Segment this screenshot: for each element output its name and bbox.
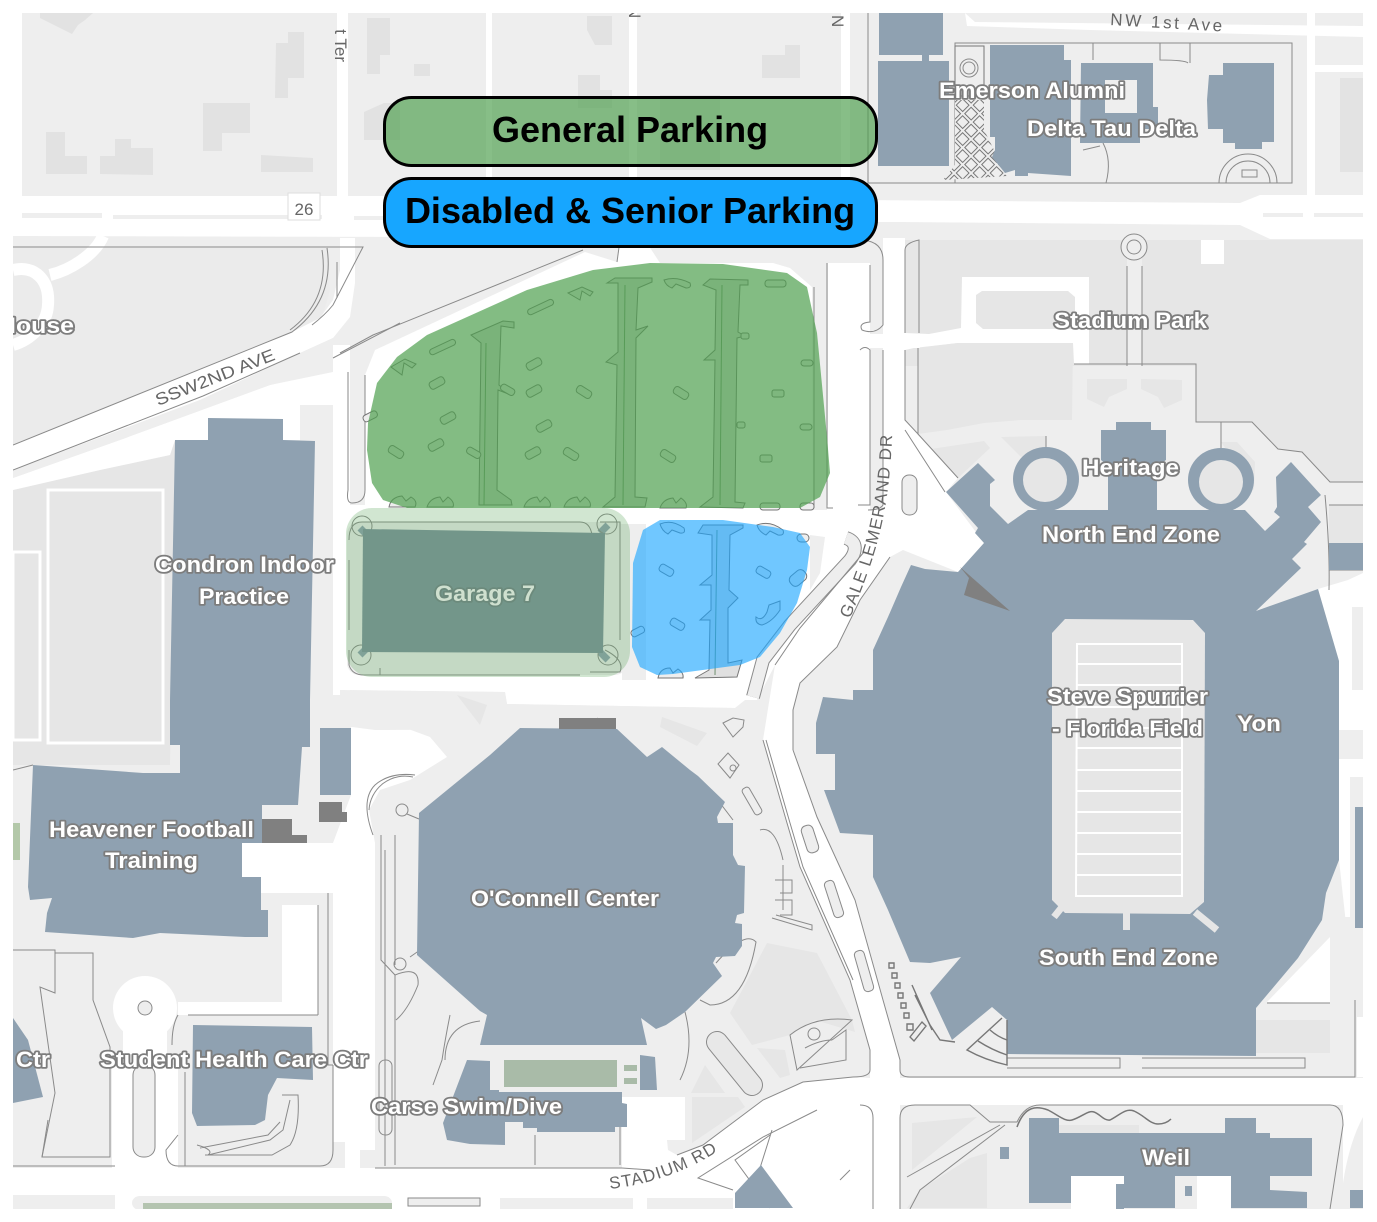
road label: NW 1st Ave: NW 1st Ave (1110, 10, 1223, 35)
label: Steve Spurrier: Steve Spurrier (1047, 684, 1208, 709)
pool deck and pool (504, 1055, 657, 1090)
land details (13, 234, 1363, 1210)
lots (13, 240, 1363, 1208)
legend: Disabled & Senior Parking (384, 178, 876, 246)
stadium dark wedge (960, 567, 1010, 611)
label: Practice: Practice (199, 584, 289, 609)
label: Weil: Weil (1142, 1145, 1190, 1170)
label: Heritage: Heritage (1082, 455, 1179, 480)
legend: General Parking (384, 98, 876, 166)
other buildings (735, 1165, 793, 1208)
route shield 26: 26 (295, 200, 313, 219)
label: Carse Swim/Dive: Carse Swim/Dive (371, 1094, 562, 1119)
garage corner stair towers (351, 514, 618, 665)
label: O'Connell Center: O'Connell Center (471, 886, 659, 911)
label: Condron Indoor: Condron Indoor (155, 552, 334, 577)
label: Stadium Park: Stadium Park (1054, 308, 1208, 333)
label: North End Zone: North End Zone (1042, 522, 1220, 547)
legend: Disabled & Senior Parking: Disabled & Senior Parking (405, 190, 855, 231)
label: Heavener Football: Heavener Football (49, 817, 254, 842)
label: Florida Field: - Florida Field (1052, 716, 1203, 741)
buildings: north block (878, 13, 1274, 180)
road label: N: N (828, 15, 847, 27)
road label: SW 2nd Ave: SSW2ND AVE (153, 345, 278, 410)
building: O'Connell Center (417, 728, 745, 1045)
garage zone overlay (346, 508, 630, 677)
building: Condron Indoor Practice and Heavener (28, 418, 315, 938)
building: Weil (1000, 1108, 1312, 1209)
building: Steve Spurrier stadium (816, 422, 1339, 1056)
disabled and senior parking zone overlay (632, 520, 810, 675)
road label: Stadium Rd: STADIUM RD (610, 1144, 715, 1188)
route shield 26 (288, 193, 320, 220)
label: Training: Training (105, 848, 198, 873)
road path reference (610, 1150, 720, 1189)
stadium south seating fan (889, 963, 1007, 1065)
road path reference (850, 440, 892, 619)
lot islands under the parking zones (362, 278, 814, 678)
label: Garage 7: Garage 7 (435, 581, 535, 606)
legend: General Parking: General Parking (492, 109, 768, 150)
label: South End Zone: South End Zone (1039, 945, 1218, 970)
building: Garage 7 (362, 529, 605, 653)
stadium towers (1013, 447, 1254, 512)
faded residential buildings (40, 13, 1363, 175)
playing field (1052, 619, 1217, 930)
building: Carse Swim/Dive (443, 1060, 627, 1145)
label: Yon: Yon (1237, 711, 1281, 736)
road label: Gale Lemerand Dr: GALE LEMERAND DR (840, 436, 892, 616)
general parking zone overlay (367, 263, 830, 508)
label: Emerson Alumni: Emerson Alumni (939, 78, 1125, 103)
label: House: House (0, 313, 74, 338)
label: Student Health Care Ctr: Student Health Care Ctr (100, 1047, 368, 1072)
label: Ctr: Ctr (16, 1047, 50, 1072)
road label: N: N (625, 6, 644, 18)
road label: Ter: t Ter (331, 29, 350, 62)
label: Delta Tau Delta: Delta Tau Delta (1027, 116, 1197, 141)
building: Student Health Care (192, 1025, 313, 1126)
